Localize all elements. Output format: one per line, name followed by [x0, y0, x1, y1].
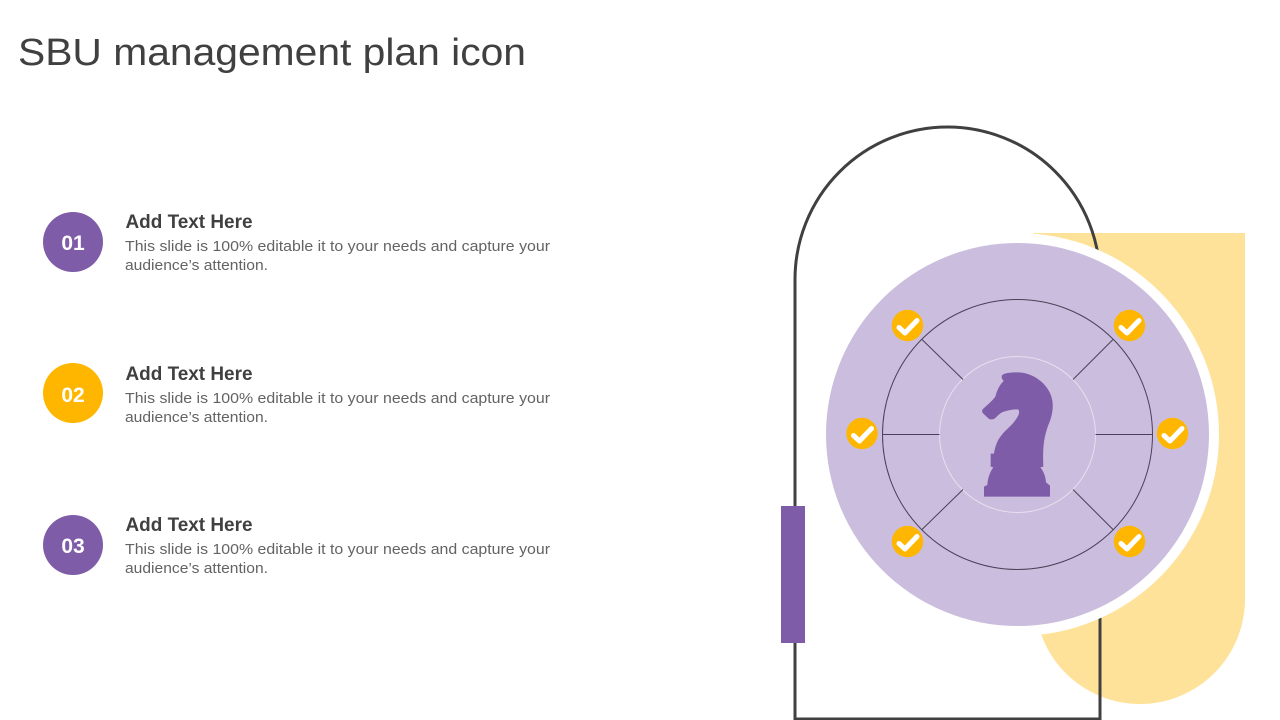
description 01: audience’s attention.	[125, 257, 268, 274]
white ring	[816, 233, 1219, 636]
check: bottom left	[892, 526, 923, 557]
check: right	[1157, 418, 1188, 449]
yellow backdrop shape	[1033, 233, 1245, 704]
description 01: This slide is 100% editable it to your needs and capture your	[125, 238, 550, 255]
outer dark ring	[882, 300, 1152, 570]
title: SBU management plan icon	[18, 32, 526, 74]
description 02: This slide is 100% editable it to your needs and capture your	[125, 390, 550, 407]
check: top left	[892, 310, 923, 341]
description 03: audience’s attention.	[125, 560, 268, 577]
list item 02	[43, 363, 550, 426]
badge 02	[43, 363, 103, 423]
badge 02: 02	[61, 384, 85, 407]
badge 03: 03	[61, 535, 85, 558]
list item 01	[43, 212, 550, 274]
inner light ring	[940, 356, 1096, 512]
badge 01: 01	[61, 232, 85, 255]
check: left	[846, 418, 878, 449]
check: bottom right	[1114, 526, 1145, 557]
lilac disc	[826, 243, 1209, 626]
arch outline	[795, 127, 1100, 719]
icon: chess knight	[982, 372, 1053, 497]
diagram: strategy wheel	[781, 127, 1245, 719]
badge 03	[43, 515, 103, 575]
purple tab	[781, 506, 805, 643]
badge 01	[43, 212, 103, 272]
heading 03: Add Text Here	[126, 515, 252, 536]
description 03: This slide is 100% editable it to your needs and capture your	[125, 541, 550, 558]
list item 03	[43, 515, 550, 577]
description 02: audience’s attention.	[125, 409, 268, 426]
check: top right	[1114, 310, 1145, 341]
heading 02: Add Text Here	[126, 364, 252, 385]
check badges	[846, 310, 1188, 557]
spokes	[882, 340, 1152, 530]
heading 01: Add Text Here	[126, 212, 252, 233]
